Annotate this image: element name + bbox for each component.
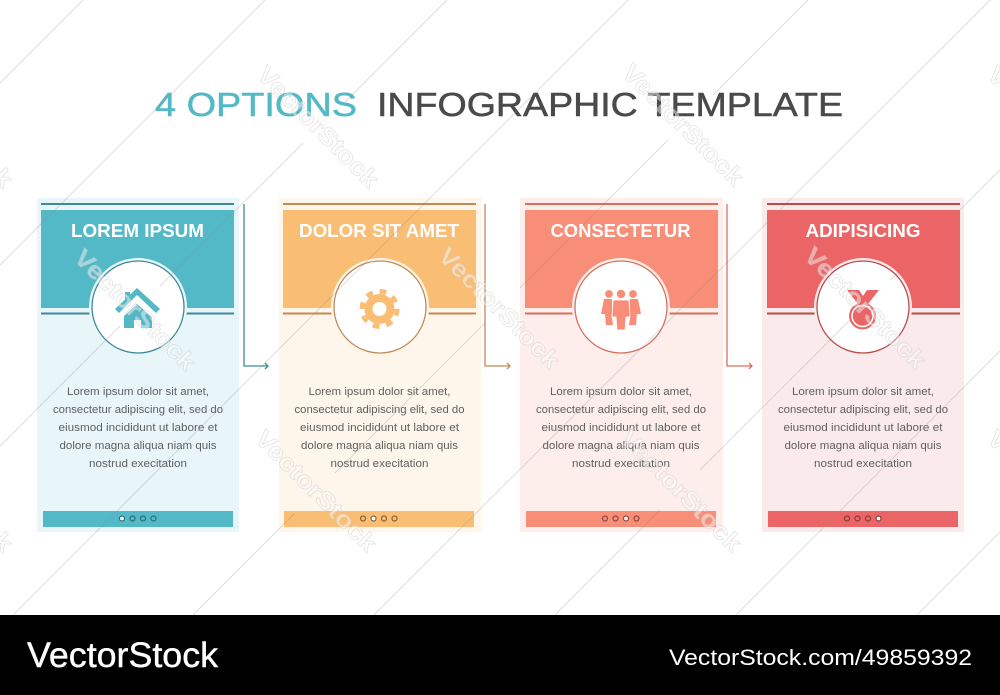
body text: nostrud execitation (330, 458, 428, 470)
panel: dolor sit amet (279, 198, 481, 532)
icon: gear (331, 258, 429, 356)
body text: dolore magna aliqua niam quis (784, 440, 942, 452)
body text: eiusmod incididunt ut labore et (300, 422, 459, 434)
body text: Lorem ipsum dolor sit amet, (308, 386, 450, 398)
watermark text: VectorStock (69, 244, 201, 377)
arrow: third to fourth (727, 204, 752, 369)
body text (778, 386, 948, 470)
heading: DOLOR SIT AMET (299, 221, 459, 241)
body text: consectetur adipiscing elit, sed do (536, 404, 706, 416)
title (155, 86, 843, 123)
footer bar with dots (43, 511, 233, 527)
body text: nostrud execitation (89, 458, 187, 470)
panel: adipisicing (762, 198, 964, 532)
body text (536, 386, 706, 470)
body text: eiusmod incididunt ut labore et (542, 422, 700, 434)
body text: nostrud execitation (814, 458, 912, 470)
watermark text: VectorStock (433, 242, 565, 375)
body text: dolore magna aliqua niam quis (60, 440, 217, 452)
watermark text: VectorStock (250, 425, 382, 558)
body text: consectetur adipiscing elit, sed do (778, 404, 948, 416)
body text (294, 386, 464, 470)
header band (767, 210, 960, 308)
body text: consectetur adipiscing elit, sed do (294, 404, 464, 416)
watermark text: VectorStock (617, 59, 749, 192)
header band (41, 210, 234, 308)
title: INFOGRAPHIC TEMPLATE (377, 86, 843, 123)
body text: dolore magna aliqua niam quis (301, 440, 459, 452)
body text: Lorem ipsum dolor sit amet, (67, 386, 209, 398)
body text: Lorem ipsum dolor sit amet, (550, 386, 692, 398)
header band (283, 210, 476, 308)
panel: lorem ipsum (37, 198, 239, 532)
footer bar with dots (526, 511, 716, 527)
watermark text: VectorStock (799, 242, 931, 375)
heading: CONSECTETUR (550, 221, 690, 241)
body text: nostrud execitation (572, 458, 670, 470)
heading: ADIPISICING (806, 221, 920, 241)
watermark text: VectorStock (615, 425, 747, 558)
watermark text (0, 59, 1000, 558)
title: 4 OPTIONS (155, 86, 357, 123)
arrow: first to second (244, 204, 268, 369)
body text: dolore magna aliqua niam quis (542, 440, 700, 452)
panel: consectetur (520, 198, 723, 532)
body text: consectetur adipiscing elit, sed do (53, 404, 223, 416)
watermark text: VectorStock (252, 61, 384, 194)
body text (53, 386, 223, 470)
body text: Lorem ipsum dolor sit amet, (792, 386, 934, 398)
footer bar with dots (284, 511, 474, 527)
body text: eiusmod incididunt ut labore et (58, 422, 218, 434)
heading: LOREM IPSUM (71, 221, 204, 241)
icon: house (89, 258, 187, 356)
footer bar with dots (768, 511, 958, 527)
footer url: VectorStock.com/49859392 (669, 645, 972, 670)
icon: people (572, 258, 670, 356)
footer logo: VectorStock (27, 636, 219, 675)
header band (525, 210, 718, 308)
arrow: second to third (485, 204, 510, 369)
body text: eiusmod incididunt ut labore et (784, 422, 942, 434)
footer band (0, 615, 1000, 695)
icon: medal (814, 258, 912, 356)
